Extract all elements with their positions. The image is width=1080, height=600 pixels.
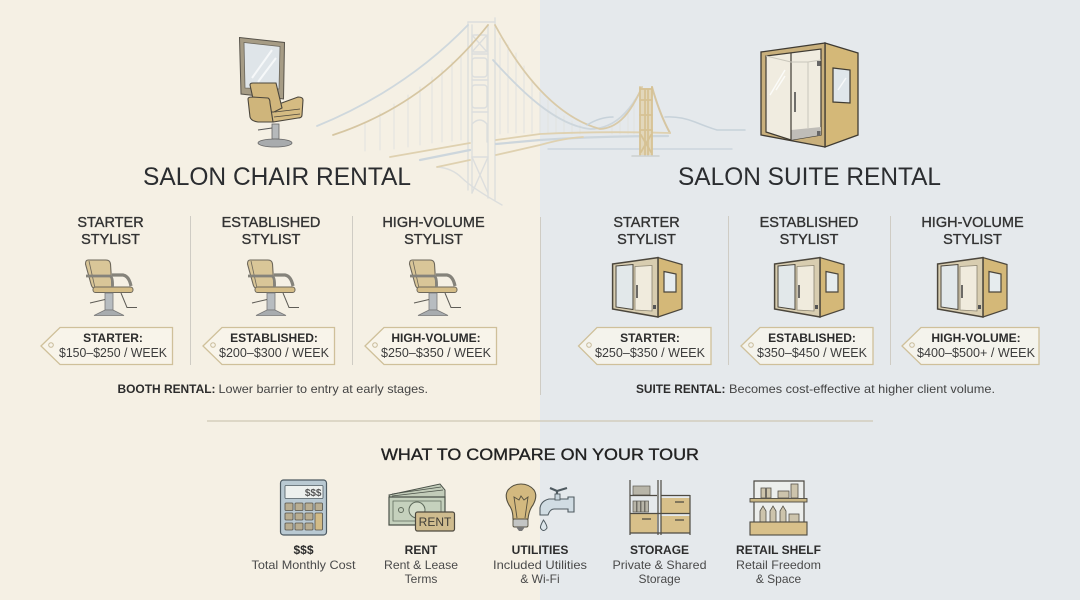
panel: suite tier starter: $250–$350 / WEEK — [595, 346, 706, 360]
panel: suite tier established: $350–$450 / WEEK — [757, 346, 868, 360]
item: utilities: & Wi-Fi — [520, 572, 560, 586]
item: total monthly cost: $$$ — [293, 543, 314, 557]
item: total monthly cost — [252, 480, 356, 572]
panel: chair tier established: ESTABLISHED — [222, 215, 320, 231]
icon: cash with rent tag: RENT — [419, 515, 452, 529]
icon: salon suite cabin — [761, 43, 858, 147]
item: rent: RENT — [405, 543, 438, 557]
panel: suite tier established: ESTABLISHED — [760, 215, 858, 231]
item: utilities: UTILITIES — [512, 543, 568, 557]
item: retail shelf: & Space — [756, 572, 802, 586]
panel: suite tier high-volume: HIGH-VOLUME — [921, 215, 1024, 231]
item: storage — [612, 480, 706, 586]
item: retail shelf: Retail Freedom — [736, 558, 821, 572]
item: retail shelf: RETAIL SHELF — [736, 543, 821, 557]
panel: suite tier high-volume: STYLIST — [943, 232, 1002, 248]
item: rent — [384, 484, 458, 586]
panel: chair tier high-volume — [365, 215, 496, 364]
heading: what to compare on your tour: WHAT TO COMPARE ON YOUR TOUR — [381, 445, 699, 464]
panel: suite tier high-volume — [902, 215, 1039, 364]
panel: chair tier starter — [41, 215, 172, 364]
icon: storage shelving — [630, 480, 690, 535]
panel: chair tier established: $200–$300 / WEEK — [219, 346, 330, 360]
dividers — [190, 216, 890, 395]
item: utilities — [493, 484, 587, 586]
icon: faucet — [540, 488, 574, 530]
icon: salon chair with mirror — [240, 38, 303, 147]
panel: chair tier established — [203, 215, 334, 364]
note: suite rental: SUITE RENTAL: — [636, 382, 726, 396]
item: storage: STORAGE — [630, 543, 689, 557]
panel: suite tier starter — [578, 215, 711, 364]
panel: chair tier starter: STARTER — [77, 215, 144, 231]
item: storage: Storage — [638, 572, 681, 586]
panel: suite tier starter: STARTER: — [620, 331, 680, 345]
note: booth rental — [118, 382, 428, 396]
panel: salon chair rental background — [0, 0, 540, 600]
panel: chair tier starter: STYLIST — [81, 232, 140, 248]
illustration: Golden Gate Bridge — [317, 18, 745, 205]
note: booth rental: Lower barrier to entry at early stages. — [218, 382, 428, 396]
item: retail shelf — [736, 481, 821, 586]
item: utilities: Included Utilities — [493, 558, 587, 572]
item: rent: Rent & Lease — [384, 558, 458, 572]
note: suite rental — [636, 382, 995, 396]
panel: suite tier starter: STARTER — [613, 215, 680, 231]
panel: chair tier high-volume: STYLIST — [404, 232, 463, 248]
panel: salon suite rental background — [540, 0, 1080, 600]
item: storage: Private & Shared — [612, 558, 706, 572]
icon: retail shelf — [750, 481, 807, 535]
panel: suite tier starter: STYLIST — [617, 232, 676, 248]
panel: chair tier starter: $150–$250 / WEEK — [59, 346, 168, 360]
panel: suite tier established: ESTABLISHED: — [768, 331, 856, 345]
item: rent: Terms — [405, 572, 437, 586]
note: booth rental: BOOTH RENTAL: — [118, 382, 216, 396]
item: total monthly cost: Total Monthly Cost — [252, 558, 356, 572]
panel: chair tier starter: STARTER: — [83, 331, 143, 345]
panel: chair tier established: STYLIST — [242, 232, 301, 248]
note: suite rental: Becomes cost-effective at higher client volume. — [729, 382, 995, 396]
panel: chair tier high-volume: HIGH-VOLUME: — [391, 331, 481, 345]
section divider — [207, 420, 873, 422]
icon: light bulb — [506, 484, 536, 531]
panel: suite tier high-volume: HIGH-VOLUME: — [931, 331, 1021, 345]
title: salon chair rental: SALON CHAIR RENTAL — [143, 163, 411, 191]
panel: chair tier established: ESTABLISHED: — [230, 331, 318, 345]
panel: suite tier high-volume: $400–$500+ / WEEK — [917, 346, 1036, 360]
icon: calculator: $$$ — [305, 488, 322, 499]
panel: chair tier high-volume: HIGH-VOLUME — [382, 215, 485, 231]
panel: suite tier established — [741, 215, 873, 364]
panel: suite tier established: STYLIST — [780, 232, 839, 248]
title: salon suite rental: SALON SUITE RENTAL — [678, 163, 941, 191]
panel: chair tier high-volume: $250–$350 / WEEK — [381, 346, 492, 360]
